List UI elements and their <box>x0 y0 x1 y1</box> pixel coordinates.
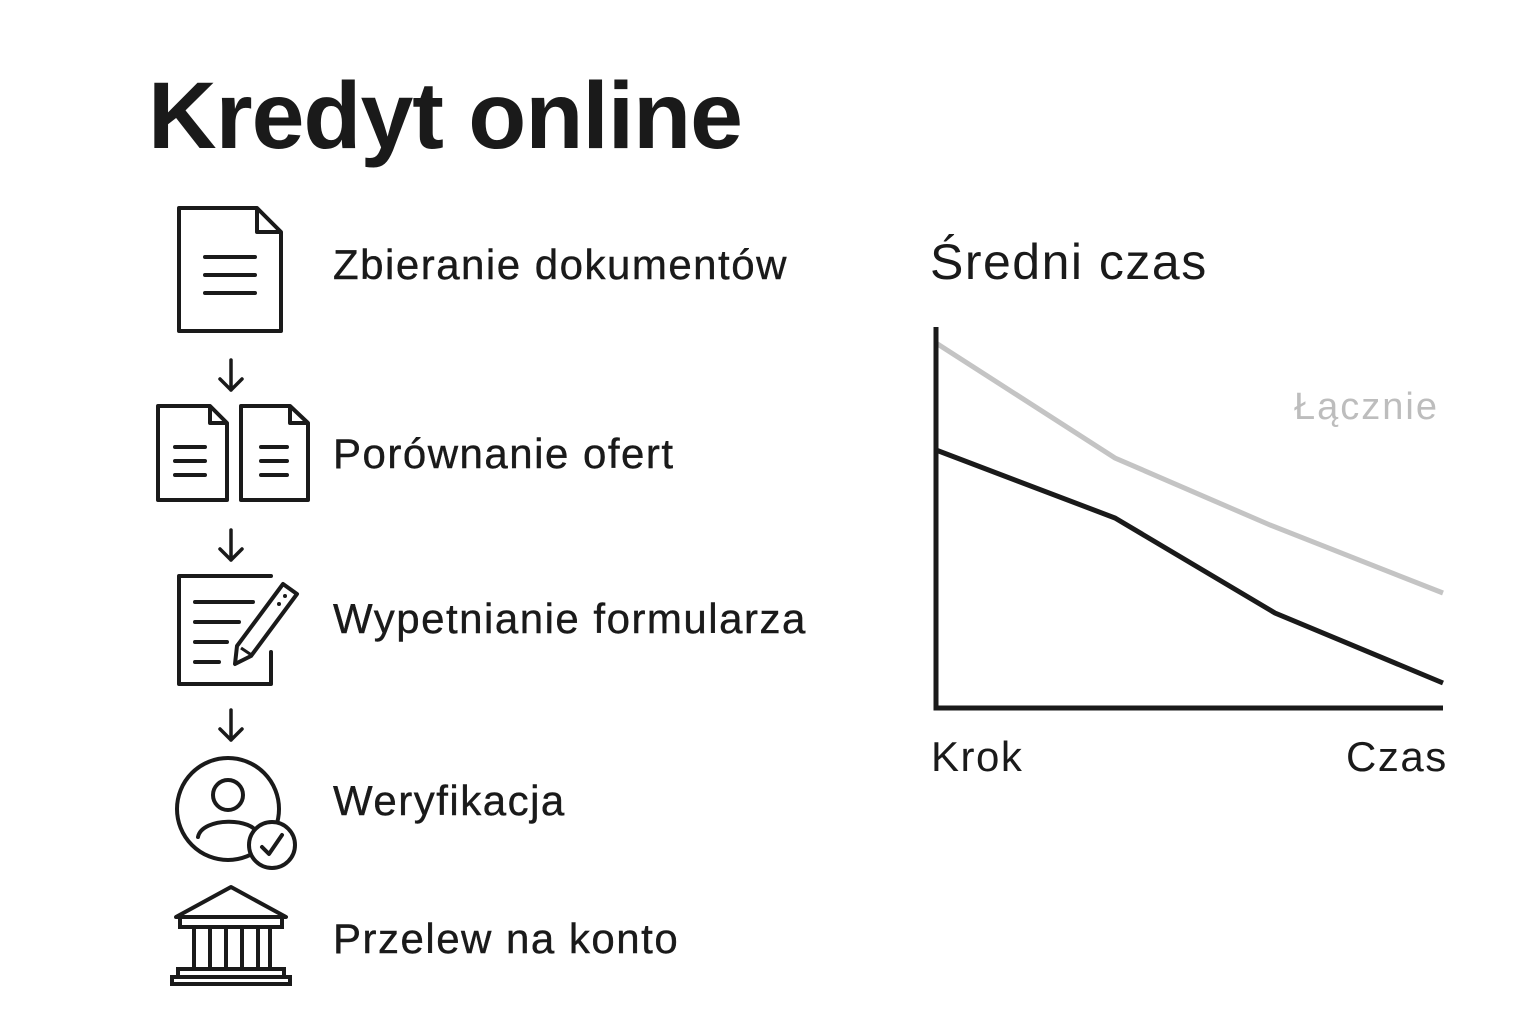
axes <box>936 327 1443 708</box>
step 2 text: Porównanie ofert <box>333 430 675 477</box>
panel: steps <box>156 206 807 986</box>
icon: user verification <box>175 756 297 870</box>
line chart <box>934 327 1444 710</box>
step 1 text: Zbieranie dokumentów <box>333 241 788 288</box>
arrow 2 <box>218 528 244 562</box>
step 4 text: Weryfikacja <box>333 777 566 824</box>
axis label: Krok: Krok <box>931 733 1023 780</box>
axis label: Czas: Czas <box>1346 733 1448 780</box>
arrow 3 <box>218 708 244 742</box>
arrow 1 <box>218 358 244 392</box>
series: step (black) <box>936 450 1443 683</box>
icon: document <box>177 206 283 333</box>
step 5 text: Przelew na konto <box>333 915 679 962</box>
icon: two documents <box>156 404 310 502</box>
chart heading: Średni czas <box>930 234 1208 290</box>
series: łącznie (gray) <box>936 343 1443 593</box>
step 3 text: Wypetnianie formularza <box>333 595 807 642</box>
title: Kredyt online <box>148 63 742 169</box>
icon: form with pen <box>177 574 300 686</box>
legend label: Łącznie: Łącznie <box>1294 386 1439 428</box>
icon: bank <box>170 885 292 986</box>
